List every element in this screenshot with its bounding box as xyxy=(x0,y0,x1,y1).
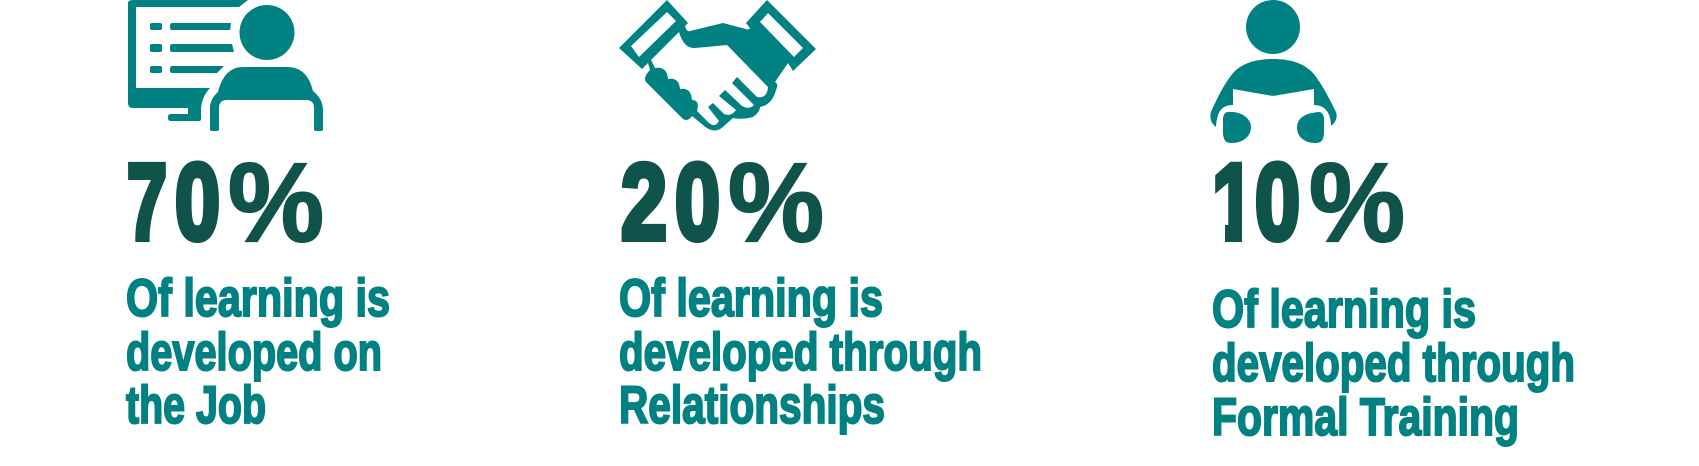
stat: 20% xyxy=(621,140,824,265)
panel: 20 percent relationships xyxy=(619,0,982,435)
stat: 20%: 2 xyxy=(621,141,667,262)
stat: 70%: % xyxy=(228,140,324,265)
panel: 10 percent formal training xyxy=(1210,0,1575,447)
stat: 10%: % xyxy=(1309,140,1405,265)
icon: person reading xyxy=(1210,0,1337,143)
text: description 10%: developed through xyxy=(1212,334,1575,393)
text: description 70%: Of learning is xyxy=(126,269,390,328)
stat: 10%: 0 xyxy=(1255,141,1300,262)
text: description 70%: the Job xyxy=(126,376,266,435)
text: description 70%: developed on xyxy=(126,323,382,382)
text: description 20%: Of learning is xyxy=(619,269,883,328)
stat: 10%: 1 xyxy=(1212,141,1256,262)
text: description 10%: Formal Training xyxy=(1212,388,1519,447)
stat: 70%: 0 xyxy=(175,141,220,262)
text: description 20%: Relationships xyxy=(619,376,885,435)
stat: 20%: % xyxy=(728,140,824,265)
text: description 10%: Of learning is xyxy=(1212,280,1476,339)
text: description 10% xyxy=(1212,280,1575,447)
icon: handshake xyxy=(619,0,816,130)
text: description 70% xyxy=(126,269,390,435)
stat: 10% xyxy=(1215,160,1404,243)
text: description 20%: developed through xyxy=(619,323,982,382)
stat: 70% xyxy=(127,140,324,265)
panel: 70 percent on the job xyxy=(126,0,390,435)
stat: 20%: 0 xyxy=(675,141,720,262)
icon: person at monitor xyxy=(128,0,323,131)
text: description 20% xyxy=(619,269,982,435)
stat: 70%: 7 xyxy=(127,141,167,262)
